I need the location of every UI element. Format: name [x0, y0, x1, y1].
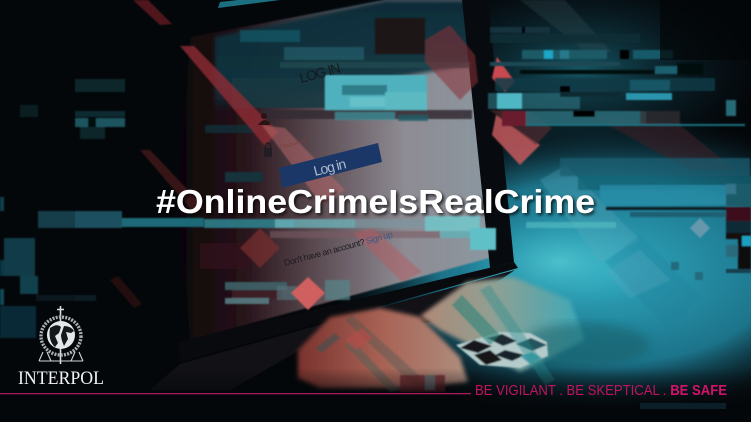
icon: padlock — [264, 143, 272, 157]
globe — [47, 321, 75, 349]
teal diagonal bands — [540, 165, 710, 330]
scales — [39, 352, 83, 361]
text: sign up prompt: Don't have an account? Sign up — [283, 229, 394, 268]
right hand — [420, 277, 585, 372]
panel: screen glitch overlay — [200, 18, 496, 304]
background glows — [330, 0, 751, 422]
login button — [279, 143, 382, 188]
text: Log in: Log in — [312, 155, 348, 179]
text: password placeholder: Password — [279, 139, 306, 151]
lower laptop bezel — [178, 262, 518, 362]
keyboard deck — [150, 270, 515, 390]
bottom fade — [0, 368, 751, 410]
left hand — [298, 308, 468, 388]
emblem — [39, 306, 83, 364]
panel: left glitch blocks — [0, 79, 204, 338]
panel: login form — [258, 60, 394, 268]
red diagonal stripes — [110, 0, 735, 310]
teal streak top left — [218, 0, 280, 8]
tagline: BE VIGILANT . BE SKEPTICAL . BE SAFE — [475, 383, 727, 399]
sleeve shading — [520, 323, 650, 367]
title: #OnlineCrimeIsRealCrime — [156, 184, 595, 221]
wreath — [41, 317, 81, 355]
finger shadows — [316, 285, 555, 392]
panel: right glitch rows — [488, 27, 751, 280]
keyboard keys — [456, 332, 548, 368]
INTERPOL logo — [18, 306, 104, 389]
upper screen teal tint — [215, 0, 480, 112]
icon: user — [258, 113, 270, 125]
panel: laptop screen — [150, 0, 518, 390]
text: LOG IN heading: LOG IN — [298, 60, 342, 86]
sword — [57, 306, 64, 364]
wordmark: INTERPOL — [18, 368, 104, 389]
magenta rule — [0, 393, 471, 394]
right laptop bezel — [462, 0, 514, 268]
panel: hands and keyboard — [298, 277, 650, 392]
